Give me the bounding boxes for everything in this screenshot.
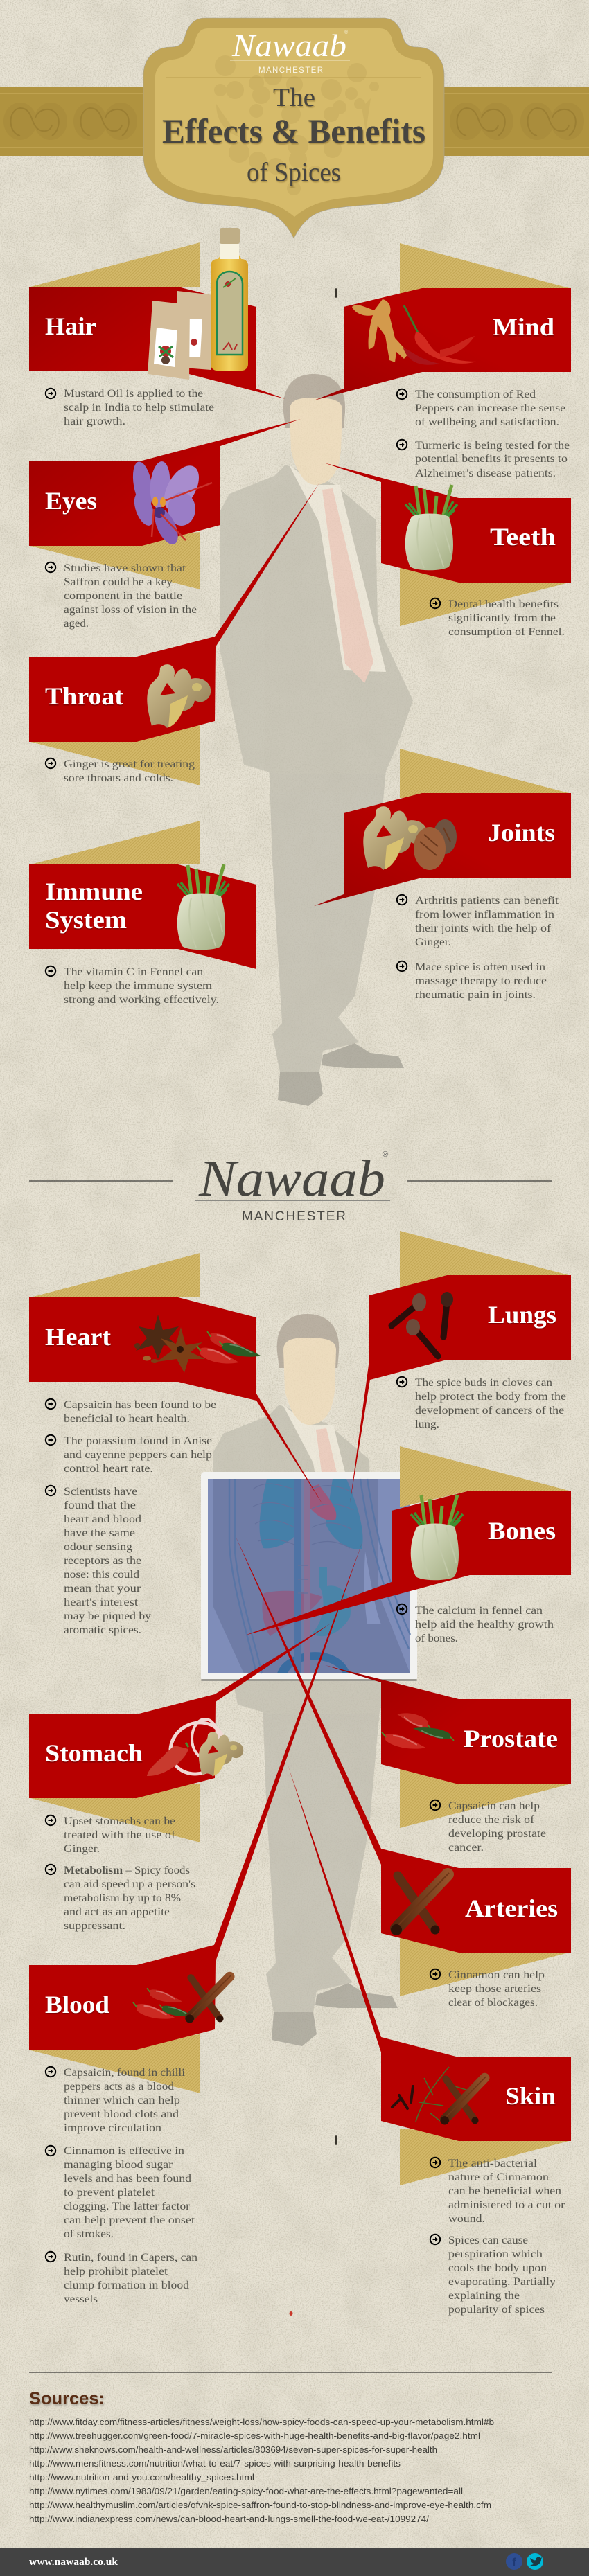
- icon: twitter: [527, 2553, 543, 2570]
- list: source urls: http://www.sheknows.com/health-and-wellness/articles/803694/seven-super-spices-for-super-health: [29, 2444, 437, 2455]
- panel: lungs: [350, 1231, 571, 1503]
- heading: stomach: Stomach: [45, 1739, 143, 1767]
- text block: teeth: significantly from the: [448, 612, 556, 624]
- text block: arteries: clear of blockages.: [448, 1997, 538, 2009]
- footer bar: [0, 2548, 589, 2576]
- text block: teeth: consumption of Fennel.: [448, 626, 565, 638]
- gold ribbon: arteries: [400, 1938, 569, 1996]
- text block: mind: Peppers can increase the sense: [415, 402, 565, 414]
- header ornament band: [0, 87, 589, 156]
- text block: stomach: [46, 1815, 195, 1932]
- logo: Nawaab Manchester divider: Nawaab: [198, 1151, 385, 1207]
- text block: heart: have the same: [64, 1527, 135, 1539]
- text block: stomach: Upset stomachs can be: [64, 1815, 175, 1827]
- panel: mind: [314, 243, 571, 400]
- heading: bones: Bones: [488, 1517, 556, 1545]
- heading: immune system: Immune: [45, 878, 143, 905]
- text block: skin: [430, 2158, 565, 2316]
- heading: heart: Heart: [45, 1323, 111, 1351]
- text block: skin: can be beneficial when: [448, 2185, 561, 2197]
- text block: stomach: metabolism by up to 8%: [64, 1892, 181, 1904]
- gold ribbon: teeth: [400, 568, 569, 626]
- text block: teeth: [430, 598, 565, 638]
- text block: arteries: keep those arteries: [448, 1983, 541, 1995]
- panel: hair: [29, 228, 285, 399]
- text block: blood: can help prevent the onset: [64, 2214, 195, 2226]
- icon: red chillies: [403, 305, 477, 365]
- text block: eyes: Studies have shown that: [64, 562, 186, 574]
- icon: fennel: [411, 1495, 463, 1580]
- text block: skin: nature of Cinnamon: [448, 2171, 549, 2183]
- text block: blood: vessels: [64, 2293, 98, 2305]
- text block: joints: Arthritis patients can benefit: [415, 895, 559, 907]
- red banner: immune: [29, 864, 256, 969]
- text block: lungs: development of cancers of the: [415, 1405, 564, 1416]
- text block: heart: and cayenne peppers can help: [64, 1449, 212, 1461]
- text block: blood: [46, 2067, 197, 2305]
- text block: skin: The anti-bacterial: [448, 2158, 538, 2169]
- text block: immune: The vitamin C in Fennel can: [64, 966, 203, 978]
- icon: ginger and nutmeg: [363, 806, 457, 870]
- text block: skin: popularity of spices: [448, 2304, 545, 2316]
- header badge: [143, 18, 444, 238]
- panel: heart: [29, 1253, 324, 1506]
- text block: heart: Capsaicin has been found to be: [64, 1399, 216, 1411]
- text block: hair: hair growth.: [64, 416, 125, 427]
- sources section: [29, 2372, 552, 2524]
- text block: joints: from lower inflammation in: [415, 909, 554, 921]
- text block: mind: Turmeric is being tested for the: [415, 440, 570, 452]
- gold ribbon: skin: [400, 2129, 569, 2185]
- text block: heart: receptors as the: [64, 1555, 141, 1567]
- red banner with pointer: skin: [288, 1764, 571, 2141]
- list: source urls: http://www.mensfitness.com/nutrition/what-to-eat/7-spices-with-surprising-health-benefits: [29, 2458, 401, 2469]
- text block: throat: [46, 758, 195, 784]
- text block: stomach: treated with the use of: [64, 1829, 176, 1841]
- panel: teeth: [324, 463, 571, 626]
- red banner with pointer: throat: [29, 483, 319, 742]
- text block: prostate: Capsaicin can help: [448, 1800, 540, 1812]
- panel: joints: [314, 749, 571, 906]
- heading: arteries: Arteries: [465, 1894, 558, 1922]
- icon: chillies and cinnamon: [133, 1975, 231, 2023]
- title: The: [273, 83, 315, 112]
- gold ribbon: throat: [30, 725, 200, 785]
- text block: mind: Alzheimer's disease patients.: [415, 468, 556, 479]
- red banner with pointer: bones: [245, 1491, 571, 1635]
- red banner with pointer: mind: [314, 288, 571, 400]
- text block: blood: clump formation in blood: [64, 2280, 189, 2291]
- text block: skin: wound.: [448, 2213, 485, 2225]
- panel: throat: [29, 483, 319, 785]
- text block: joints: rheumatic pain in joints.: [415, 989, 536, 1001]
- panel: immune system: System: [45, 906, 127, 934]
- gold ribbon: joints: [400, 749, 569, 798]
- gold ribbon: immune: [30, 821, 200, 864]
- text block: lungs: lung.: [415, 1419, 439, 1430]
- text block: skin: explaining the: [448, 2290, 520, 2302]
- red banner with pointer: heart: [29, 1297, 324, 1506]
- text block: blood: help prohibit platelet: [64, 2266, 168, 2277]
- logo: Nawaab Manchester divider: ®: [383, 1151, 388, 1159]
- icon: fennel: [177, 864, 229, 950]
- heading: throat: Throat: [45, 682, 123, 710]
- list: source urls: http://www.nytimes.com/1983/09/21/garden/eating-spicy-food-what-are-the-effects.html?pagewanted=all: [29, 2486, 463, 2496]
- text block: mind: [397, 389, 570, 479]
- icon: mustard oil bottle: [211, 228, 248, 371]
- heading: joints: Joints: [488, 819, 555, 846]
- panel: immune system: [29, 821, 256, 969]
- icon: cinnamon: [391, 1873, 449, 1935]
- icon: turmeric: [352, 299, 409, 362]
- red banner with pointer: eyes: [29, 419, 301, 546]
- text block: joints: Mace spice is often used in: [415, 961, 545, 973]
- text block: eyes: [46, 562, 197, 630]
- text block: stomach: Metabolism – Spicy foods: [64, 1865, 190, 1876]
- icon: cloves, dill and cinnamon: [392, 2067, 486, 2124]
- text block: teeth: Dental health benefits: [448, 598, 559, 610]
- text block: blood: improve circulation: [64, 2122, 161, 2134]
- text block: throat: sore throats and colds.: [64, 772, 173, 784]
- heading: lungs: Lungs: [488, 1301, 556, 1329]
- gold ribbon: blood: [30, 2034, 200, 2093]
- text block: blood: of strokes.: [64, 2228, 114, 2240]
- heading: mind: Mind: [493, 313, 554, 341]
- text block: heart: may be piqued by: [64, 1610, 151, 1622]
- text block: joints: Ginger.: [415, 936, 451, 948]
- text block: blood: thinner which can help: [64, 2095, 180, 2106]
- text block: skin: perspiration which: [448, 2248, 543, 2260]
- text block: heart: mean that your: [64, 1583, 141, 1595]
- text block: heart: control heart rate.: [64, 1463, 153, 1475]
- text block: joints: their joints with the help of: [415, 923, 552, 934]
- text block: heart: found that the: [64, 1500, 136, 1511]
- text block: prostate: developing prostate: [448, 1828, 546, 1840]
- text block: blood: managing blood sugar: [64, 2159, 173, 2171]
- text block: joints: [397, 895, 559, 1001]
- text block: blood: clogging. The latter factor: [64, 2201, 191, 2212]
- heading: hair: Hair: [45, 312, 96, 340]
- red banner with pointer: lungs: [350, 1275, 571, 1503]
- text block: skin: Spices can cause: [448, 2235, 528, 2246]
- list: source urls: http://www.nutrition-and-you.com/healthy_spices.html: [29, 2472, 254, 2482]
- text block: bones: The calcium in fennel can: [415, 1605, 543, 1617]
- text block: bones: help aid the healthy growth: [415, 1619, 554, 1631]
- red banner with pointer: arteries: [235, 1535, 571, 1953]
- text block: heart: aromatic spices.: [64, 1624, 141, 1636]
- text block: heart: Scientists have: [64, 1486, 137, 1498]
- text block: blood: to prevent platelet: [64, 2187, 155, 2199]
- text block: arteries: [430, 1969, 545, 2009]
- panel: arteries: [235, 1535, 571, 1996]
- text block: heart: odour sensing: [64, 1541, 132, 1553]
- panel: prostate: [325, 1665, 571, 1828]
- title: Effects & Benefits: [162, 112, 425, 150]
- text block: heart: nose: this could: [64, 1569, 139, 1581]
- red banner with pointer: prostate: [325, 1665, 571, 1784]
- text block: eyes: aged.: [64, 618, 89, 630]
- text block: blood: Rutin, found in Capers, can: [64, 2252, 197, 2264]
- text block: heart: beneficial to heart health.: [64, 1413, 190, 1425]
- panel: bones: [245, 1446, 571, 1635]
- text block: skin: administered to a cut or: [448, 2199, 565, 2211]
- icon: cloves: [392, 1292, 453, 1356]
- list: source urls: http://www.fitday.com/fitness-articles/fitness/weight-loss/how-spicy-foods-can-speed-up-your-metabolism.html#b: [29, 2417, 494, 2427]
- icon: star anise and chillies: [134, 1315, 261, 1373]
- text block: heart: heart and blood: [64, 1513, 141, 1525]
- text block: hair: Mustard Oil is applied to the: [64, 388, 203, 400]
- text block: bones: [397, 1604, 554, 1644]
- gold ribbon: eyes: [30, 532, 200, 589]
- text block: stomach: can aid speed up a person's: [64, 1878, 195, 1890]
- red banner with pointer: hair: [29, 287, 285, 399]
- gold ribbon: bones: [400, 1446, 569, 1507]
- icon: ginger: [147, 664, 211, 728]
- gold ribbon: hair: [30, 242, 200, 287]
- text block: blood: Capsaicin, found in chilli: [64, 2067, 186, 2079]
- text block: hair: [46, 388, 214, 427]
- website address: www.nawaab.co.uk: [29, 2557, 118, 2568]
- icon: facebook: [506, 2553, 522, 2570]
- text block: lungs: The spice buds in cloves can: [415, 1377, 552, 1389]
- heading: blood: Blood: [45, 1991, 109, 2018]
- logo: Nawaab Manchester divider: [29, 1151, 552, 1224]
- text block: joints: massage therapy to reduce: [415, 975, 547, 987]
- logo: Nawaab white: Nawaab: [231, 28, 346, 63]
- logo: Nawaab Manchester divider: MANCHESTER: [242, 1209, 346, 1224]
- text block: stomach: Ginger.: [64, 1843, 100, 1855]
- red banner with pointer: blood: [29, 1542, 362, 2050]
- icon: chillies: [382, 1713, 454, 1749]
- text block: blood: levels and has been found: [64, 2173, 191, 2185]
- header badge: ®: [344, 30, 349, 35]
- text block: hair: scalp in India to help stimulate: [64, 402, 214, 414]
- text block: throat: Ginger is great for treating: [64, 758, 195, 770]
- text block: bones: of bones.: [415, 1633, 458, 1644]
- text block: immune: help keep the immune system: [64, 980, 213, 992]
- text block: mind: potential benefits it presents to: [415, 453, 568, 465]
- red banner with pointer: stomach: [29, 1624, 331, 1798]
- text block: prostate: reduce the risk of: [448, 1814, 535, 1826]
- text block: stomach: suppressant.: [64, 1920, 125, 1932]
- text block: blood: peppers acts as a blood: [64, 2081, 174, 2093]
- heading: skin: Skin: [505, 2082, 556, 2110]
- panel: blood: [29, 1542, 362, 2093]
- text block: skin: cools the body upon: [448, 2262, 547, 2274]
- panel: eyes: [29, 419, 301, 589]
- text block: eyes: against loss of vision in the: [64, 604, 197, 616]
- title: [162, 83, 425, 187]
- panel: stomach: [29, 1624, 331, 1842]
- text block: immune: [46, 966, 219, 1006]
- text block: arteries: Cinnamon can help: [448, 1969, 545, 1981]
- list: source urls: [29, 2417, 494, 2524]
- icon: saffron flower: [130, 460, 212, 548]
- gold ribbon: prostate: [400, 1769, 569, 1828]
- text block: prostate: cancer.: [448, 1842, 484, 1854]
- text block: prostate: [430, 1800, 546, 1854]
- heading: eyes: Eyes: [45, 487, 97, 515]
- red banner with pointer: teeth: [324, 463, 571, 583]
- title: of Spices: [247, 158, 341, 187]
- watermark: food silhouettes: [214, 55, 379, 195]
- list: source urls: http://www.indianexpress.com/news/can-blood-heart-and-lungs-smell-the-food-we-eat-/1099274/: [29, 2514, 429, 2524]
- figure: man, top section: [220, 374, 413, 1106]
- heading: sources: Sources:: [29, 2389, 105, 2408]
- heading: teeth: Teeth: [490, 523, 556, 551]
- list: source urls: http://www.healthymuslim.com/articles/ofvhk-spice-saffron-found-to-stop-blindness-and-improve-eye-health.cfm: [29, 2500, 491, 2510]
- gold ribbon: stomach: [30, 1784, 200, 1842]
- text block: heart: heart's interest: [64, 1597, 139, 1608]
- icon: facebook: f: [512, 2557, 516, 2568]
- text block: immune: strong and working effectively.: [64, 994, 219, 1006]
- icon: spice bags: [148, 291, 214, 380]
- heading: prostate: Prostate: [464, 1725, 558, 1752]
- panel: skin: [288, 1764, 571, 2185]
- text block: blood: prevent blood clots and: [64, 2108, 179, 2120]
- list: source urls: http://www.treehugger.com/green-food/7-miracle-spices-with-huge-health-benefits-and-big-flavor/page2.html: [29, 2431, 480, 2441]
- text block: stomach: and act as an appetite: [64, 1906, 170, 1918]
- text block: heart: [46, 1399, 216, 1636]
- gold ribbon: lungs: [400, 1231, 569, 1288]
- header badge: MANCHESTER: [258, 66, 323, 75]
- text block: skin: evaporating. Partially: [448, 2276, 556, 2288]
- text block: eyes: Saffron could be a key: [64, 576, 173, 588]
- text block: lungs: [397, 1377, 566, 1430]
- text block: mind: The consumption of Red: [415, 389, 536, 400]
- text block: eyes: component in the battle: [64, 590, 182, 602]
- icon: fennel: [405, 485, 457, 570]
- text block: heart: The potassium found in Anise: [64, 1435, 212, 1447]
- red banner with pointer: joints: [314, 793, 571, 906]
- anatomy image card: [201, 1472, 417, 1681]
- text block: blood: Cinnamon is effective in: [64, 2145, 184, 2157]
- text block: lungs: help protect the body from the: [415, 1391, 566, 1403]
- figure: man, anatomy section: [213, 1314, 407, 2046]
- icon: chilli, onion and ginger: [147, 1713, 243, 1784]
- gold ribbon: mind: [400, 243, 570, 298]
- gold ribbon: heart: [30, 1253, 200, 1297]
- text block: mind: of wellbeing and satisfaction.: [415, 416, 559, 428]
